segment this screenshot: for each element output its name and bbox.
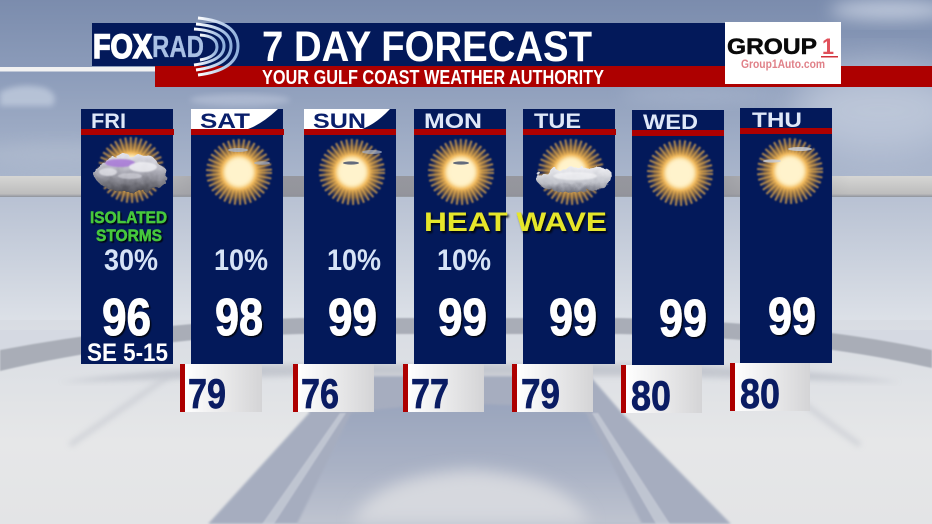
day label: SUN: [313, 110, 366, 133]
icon: sun: [428, 139, 494, 205]
low: Tuesday: 79: [521, 370, 560, 417]
icon: sun: [647, 140, 713, 206]
panel: Thursday: [740, 108, 832, 363]
day label: FRI: [91, 110, 126, 133]
title: 7 DAY FORECAST: [262, 23, 592, 71]
day tab: [304, 109, 390, 129]
heat wave callout: HEAT WAVE: [424, 207, 607, 237]
icon: sun: [206, 139, 272, 205]
logo: FOX RAD: [93, 18, 238, 75]
logo: FOX RAD: FOX: [93, 28, 152, 66]
panel: Tuesday: [523, 109, 616, 364]
precipitation chance: 30%: [104, 244, 158, 277]
low: Wednesday: [621, 365, 702, 419]
day label: THU: [752, 109, 802, 132]
conditions text: STORMS: [96, 226, 162, 245]
header banner: [0, 18, 932, 89]
wind: SE 5-15: [87, 339, 168, 367]
low: Saturday: [180, 364, 262, 417]
high temperature: 98: [215, 289, 263, 347]
panel: Sunday: [304, 109, 396, 364]
precipitation chance: 10%: [214, 244, 268, 277]
high temperature: 99: [549, 289, 597, 347]
low: Wednesday: 80: [631, 372, 671, 419]
panel: Saturday: [191, 109, 284, 364]
sponsor logo: Group 1: 1: [822, 34, 834, 59]
day label: TUE: [534, 110, 581, 133]
subtitle: YOUR GULF COAST WEATHER AUTHORITY: [262, 67, 605, 89]
sponsor logo: Group 1: GROUP: [727, 34, 817, 59]
low: Thursday: [730, 363, 810, 417]
high temperature: 99: [659, 290, 707, 348]
low: Sunday: [293, 364, 374, 417]
logo: FOX RAD: RAD: [152, 29, 204, 64]
day label: SAT: [200, 110, 250, 133]
low: Monday: 77: [411, 370, 449, 417]
sponsor logo: Group 1: [725, 22, 841, 84]
icon: sun behind cloud: [537, 139, 611, 205]
low: Sunday: 76: [301, 370, 339, 417]
conditions text: [90, 208, 167, 245]
low: Tuesday: [512, 364, 593, 417]
panel: Friday: [81, 109, 174, 367]
high temperature: 99: [328, 289, 377, 347]
panel: Monday: [414, 109, 506, 364]
panel: Wednesday: [632, 110, 724, 365]
precipitation chance: 10%: [327, 244, 381, 277]
high temperature: 99: [768, 288, 816, 346]
icon: sun with wisps of cloud: [757, 138, 823, 204]
low: Monday: [403, 364, 484, 417]
conditions text: ISOLATED: [90, 208, 167, 227]
sponsor logo: Group 1: Group1Auto.com: [741, 59, 825, 71]
high temperature: 99: [438, 289, 487, 347]
day label: WED: [643, 111, 698, 134]
day label: MON: [424, 110, 482, 133]
high temperature: 96: [102, 289, 151, 347]
low: Thursday: 80: [740, 370, 780, 417]
day tab: [191, 109, 278, 129]
low: Saturday: 79: [188, 370, 226, 417]
precipitation chance: 10%: [437, 244, 491, 277]
icon: sun: [319, 139, 385, 205]
icon: storm cloud with sun: [94, 137, 168, 203]
